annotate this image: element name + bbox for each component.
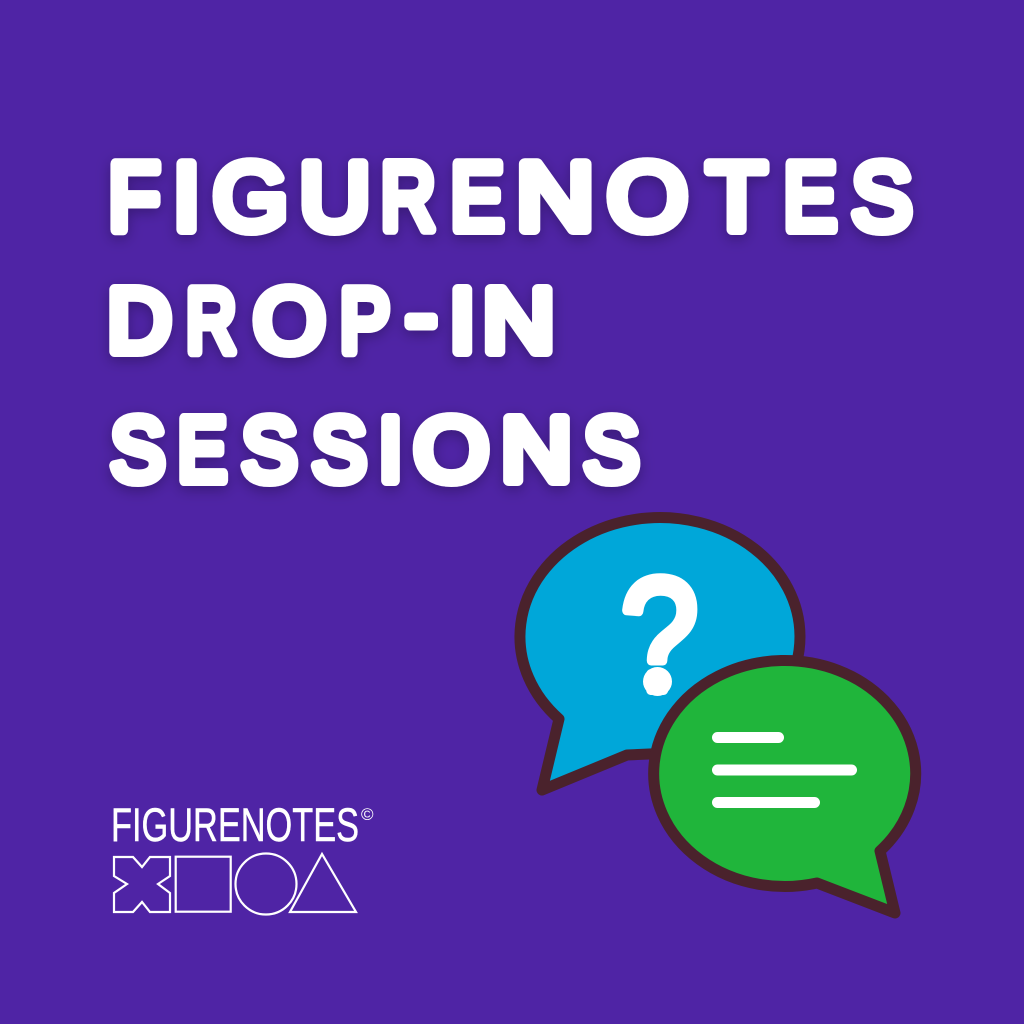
title line 1: T [707, 144, 766, 250]
title line 3: S [312, 400, 366, 500]
title line 1: E [450, 144, 504, 250]
text line long [712, 764, 857, 776]
title line 3: E [178, 400, 227, 500]
title line 3: S [110, 400, 165, 500]
title line 1: E [784, 144, 837, 250]
title [108, 144, 912, 500]
title line 1: F [108, 144, 160, 250]
title line 2: P [340, 272, 390, 372]
title line 1: U [300, 144, 370, 250]
circle shape [236, 854, 296, 914]
title line 2: - [406, 266, 436, 366]
title line 1: S [852, 144, 912, 250]
title line 2: D [108, 272, 171, 372]
question mark glyph: ? [621, 545, 698, 724]
title line 2: R [186, 272, 236, 372]
title line 1: G [213, 144, 288, 250]
logo: Figurenotes [111, 798, 374, 914]
title line 1: R [381, 144, 436, 250]
title line 1: N [516, 144, 594, 250]
icon: green speech bubble with text lines [654, 660, 916, 913]
blue bubble shape [520, 518, 800, 790]
title line 2: N [483, 272, 555, 372]
title line 3: N [501, 400, 572, 500]
title line 3: S [584, 400, 639, 500]
title line 1: O [607, 144, 688, 250]
text line short [712, 732, 784, 743]
title line 1: I [173, 144, 200, 250]
question mark [621, 545, 698, 724]
logo wordmark: FIGURENOTES [111, 798, 359, 851]
title line 3: I [378, 400, 402, 500]
square shape [176, 857, 231, 912]
title line 2: O [254, 272, 325, 372]
cross shape [114, 857, 170, 912]
triangle shape [290, 854, 356, 912]
question mark round dot [643, 667, 672, 696]
title line 3: O [414, 400, 489, 500]
green bubble shape [654, 660, 916, 913]
title line 3: S [242, 400, 297, 500]
text line medium [712, 797, 820, 808]
logo shapes [114, 854, 356, 914]
title line 2: I [450, 272, 475, 372]
copyright symbol: © [361, 805, 374, 824]
icon: blue speech bubble with question mark [520, 518, 800, 790]
